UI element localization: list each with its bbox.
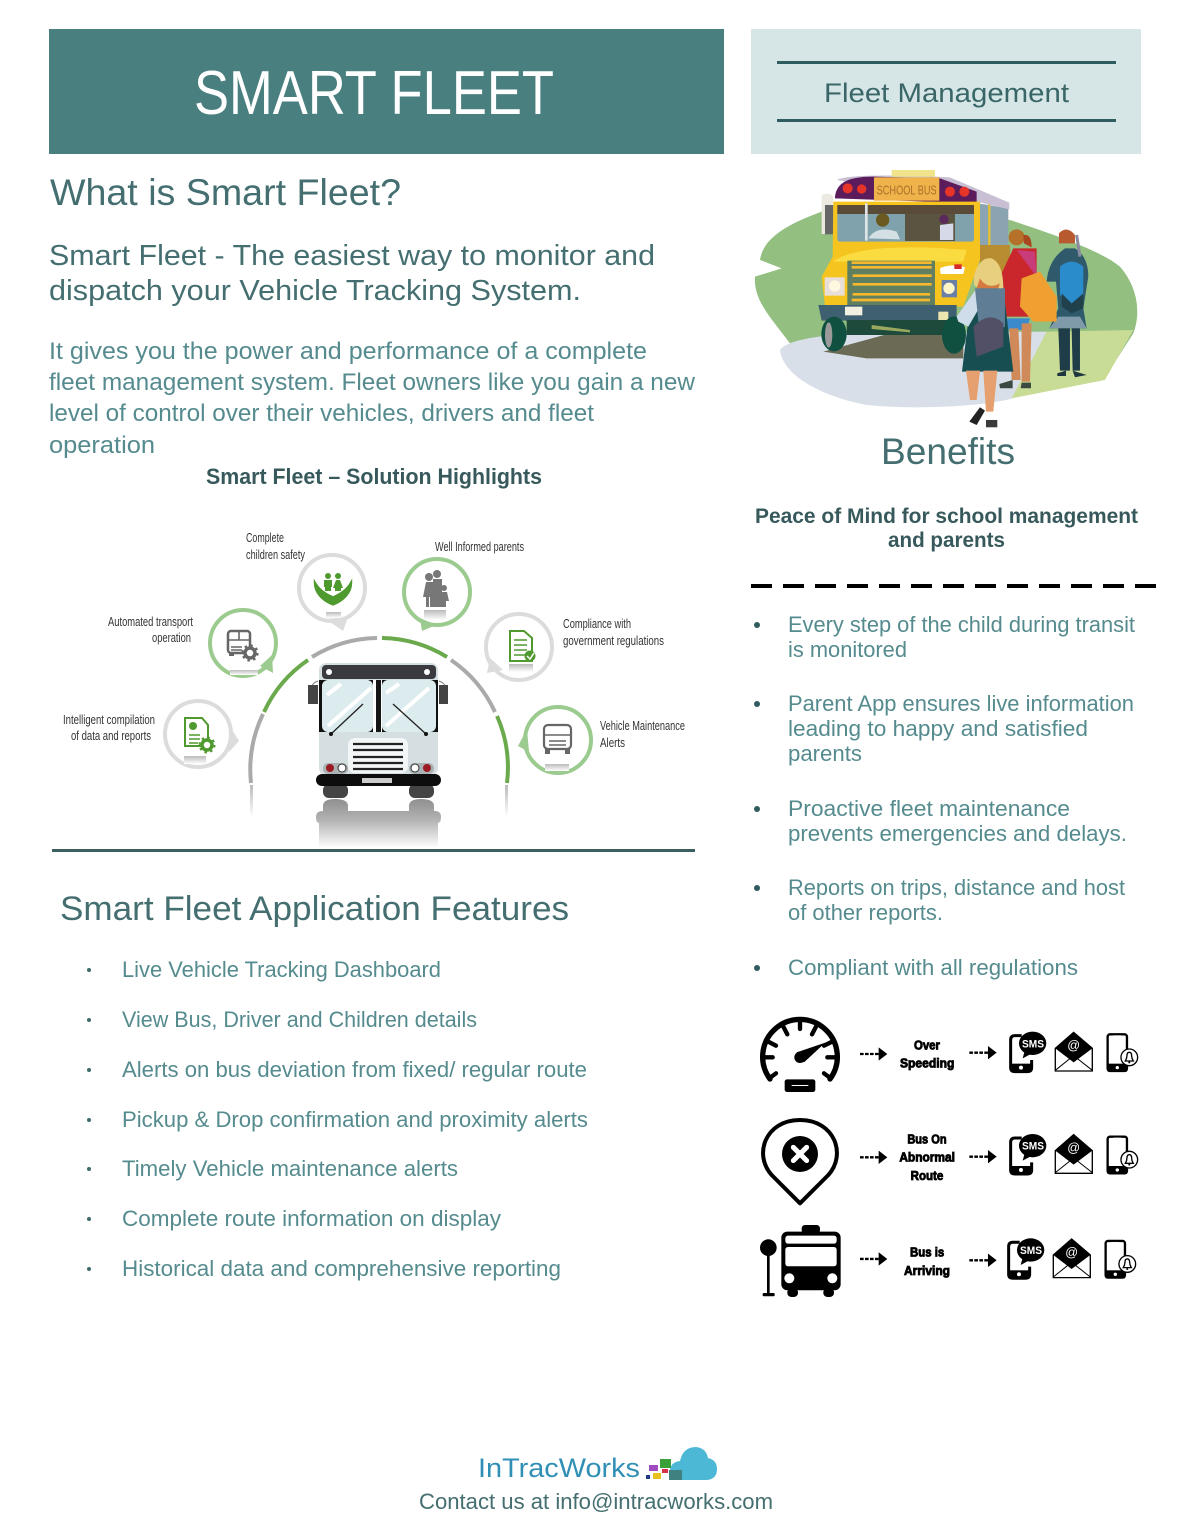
heading: application features: Smart Fleet Application Features: [60, 890, 569, 928]
panel: fleet management header: [751, 29, 1141, 154]
callout: automated transport: [108, 610, 276, 676]
icon: speedometer row: Speeding: [900, 1056, 954, 1071]
text block: description: [49, 338, 696, 459]
text block: tagline: [49, 240, 655, 307]
logo: InTracWorks: [478, 1447, 717, 1483]
icon: speedometer row: SMS: [1022, 1038, 1044, 1050]
callout: maintenance alerts: Vehicle Maintenance: [600, 719, 685, 733]
list: benefits: parents: [788, 741, 862, 766]
list: application features: Historical data and comprehensive reporting: [122, 1256, 561, 1281]
list: benefits: Every step of the child during transit: [788, 612, 1135, 637]
callout: data and reports: [63, 701, 239, 767]
callout: data and reports: Intelligent compilation: [63, 713, 155, 727]
text block: description: It gives you the power and performance of a complete: [49, 338, 647, 365]
list: benefits: Parent App ensures live information: [788, 691, 1134, 716]
illustration: school bus and children: [755, 170, 1137, 427]
list: application features: Alerts on bus deviation from fixed/ regular route: [122, 1057, 587, 1082]
icon: abnormal route row: Abnormal: [899, 1150, 955, 1165]
heading: benefits: Benefits: [881, 431, 1015, 472]
list: application features: [87, 957, 588, 1281]
text block: tagline: Smart Fleet - The easiest way to monitor and: [49, 240, 655, 272]
callout: informed parents: Well Informed parents: [435, 540, 524, 554]
callout: children safety: children safety: [246, 548, 306, 562]
text block: peace of mind: [755, 505, 1138, 552]
title banner: [49, 29, 724, 154]
heading: what is smart fleet: What is Smart Fleet?: [50, 172, 401, 213]
list: benefits: of other reports.: [788, 900, 943, 925]
icon: abnormal route row: Route: [911, 1168, 943, 1183]
icon: bus stop row: SMS: [1020, 1245, 1042, 1257]
bus illustration: [308, 663, 448, 848]
callout: maintenance alerts: Alerts: [600, 736, 625, 750]
text block: description: operation: [49, 432, 155, 459]
callout: data and reports: of data and reports: [71, 729, 151, 743]
icon: abnormal route row: [763, 1120, 1138, 1203]
illustration: school bus and children: SCHOOL BUS: [877, 183, 937, 198]
text block: peace of mind: and parents: [888, 529, 1005, 552]
list: benefits: Proactive fleet maintenance: [788, 796, 1070, 821]
panel: fleet management header: Fleet Management: [824, 78, 1070, 108]
text block: peace of mind: Peace of Mind for school management: [755, 505, 1138, 528]
icon: abnormal route row: @: [1067, 1141, 1080, 1155]
icon: bus stop row: @: [1065, 1245, 1078, 1259]
callout: children safety: Complete: [246, 531, 284, 545]
icon: abnormal route row: SMS: [1022, 1141, 1044, 1153]
list: benefits: Reports on trips, distance and host: [788, 875, 1125, 900]
heading: solution highlights: Smart Fleet – Solution Highlights: [206, 464, 542, 489]
icon: speedometer row: @: [1067, 1039, 1080, 1053]
list: benefits: [754, 612, 1135, 980]
arc around the bus: [250, 638, 508, 817]
logo: InTracWorks: InTracWorks: [478, 1453, 640, 1483]
callout: automated transport: operation: [152, 631, 191, 645]
title banner: SMART FLEET: [194, 59, 554, 128]
callout: compliance: Compliance with: [563, 617, 631, 631]
text block: contact: Contact us at info@intracworks.com: [419, 1489, 773, 1514]
list: benefits: is monitored: [788, 637, 907, 662]
chart: solution highlights bus diagram: [63, 531, 685, 848]
list: application features: Live Vehicle Tracking Dashboard: [122, 957, 441, 982]
icon: bus stop row: Bus is: [910, 1245, 944, 1260]
list: benefits: leading to happy and satisfied: [788, 716, 1088, 741]
text block: description: level of control over their vehicles, drivers and fleet: [49, 400, 594, 427]
icon: speedometer row: [763, 1019, 1138, 1092]
callout: maintenance alerts: [518, 707, 685, 773]
list: application features: Complete route information on display: [122, 1206, 501, 1231]
list: benefits: prevents emergencies and delays.: [788, 821, 1127, 846]
text block: tagline: dispatch your Vehicle Tracking System.: [49, 275, 581, 307]
list: application features: Pickup & Drop confirmation and proximity alerts: [122, 1107, 588, 1132]
list: benefits: Compliant with all regulations: [788, 955, 1078, 980]
callout: children safety: [246, 531, 365, 631]
icon: speedometer row: Over: [914, 1037, 940, 1052]
icon: abnormal route row: Bus On: [907, 1131, 947, 1146]
list: application features: View Bus, Driver and Children details: [122, 1007, 477, 1032]
callout: compliance: [486, 614, 664, 680]
list: application features: Timely Vehicle maintenance alerts: [122, 1156, 458, 1181]
icon: bus stop row: [760, 1225, 1136, 1297]
callout: informed parents: [404, 540, 524, 631]
callout: automated transport: Automated transport: [108, 615, 193, 629]
chart: alert flows: [760, 1019, 1138, 1297]
callout: compliance: government regulations: [563, 634, 664, 648]
text block: description: fleet management system. Fleet owners like you gain a new: [49, 369, 696, 396]
icon: bus stop row: Arriving: [904, 1263, 950, 1278]
